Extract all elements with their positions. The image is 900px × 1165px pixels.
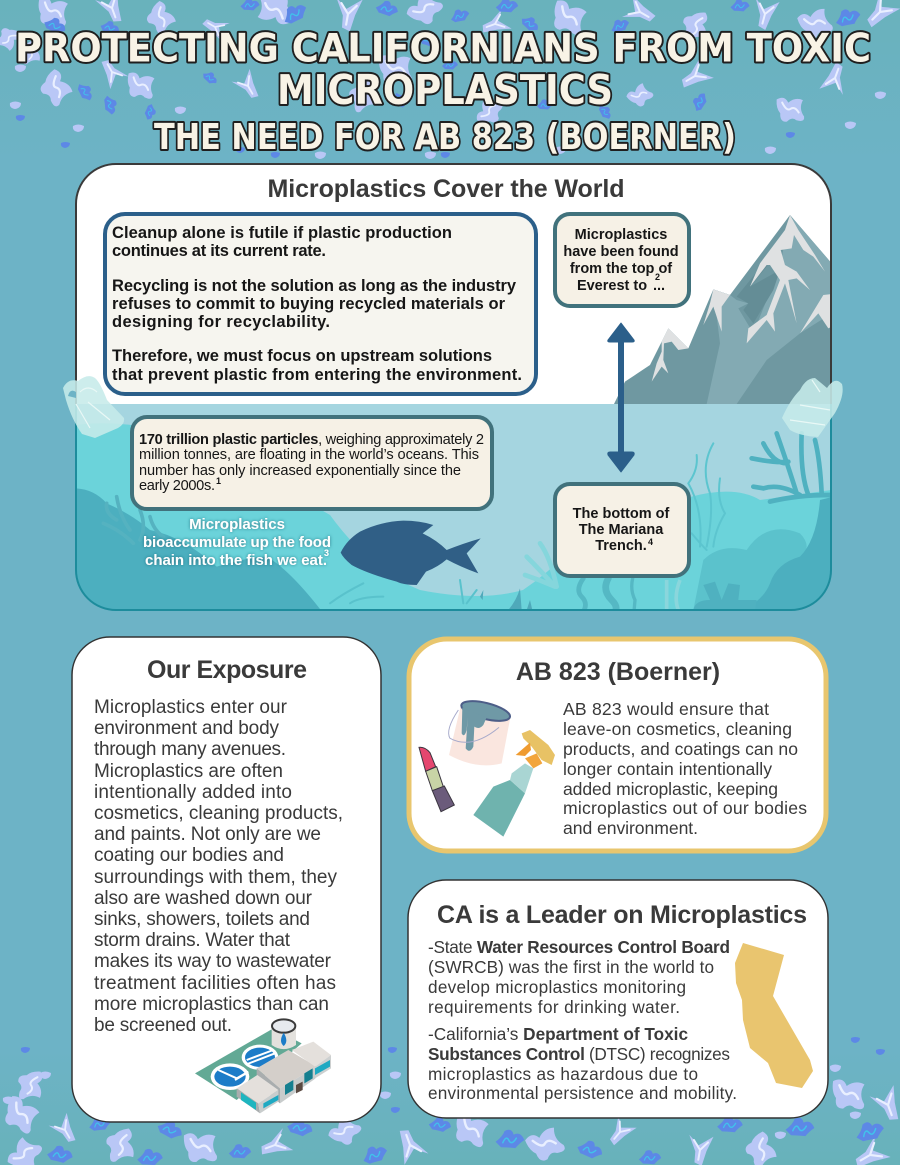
body text: intentionally added into (94, 782, 292, 803)
icon: plastic bag right (782, 378, 843, 437)
body text: requirements for drinking water. (428, 997, 680, 1017)
body text: be screened out. (94, 1015, 232, 1036)
body text: -California’s Department of Toxic (428, 1024, 688, 1044)
body text: AB 823 would ensure that (563, 699, 769, 719)
text: bioaccumulation: bioaccumulate up the food (143, 534, 331, 551)
callout: upstream solutions: designing for recyclability. (112, 313, 330, 331)
body text: longer contain intentionally (563, 759, 772, 779)
body text (563, 699, 807, 838)
heading: AB 823 (Boerner) (516, 658, 720, 686)
callout: 170 trillion particles (132, 417, 492, 509)
icon: california map (735, 943, 813, 1088)
text: bioaccumulation: chain into the fish we eat. (145, 552, 327, 569)
callout: mariana trench: Trench. (595, 538, 647, 554)
body text: storm drains. Water that (94, 930, 291, 951)
body text: environment and body (94, 718, 280, 739)
mountains (614, 215, 832, 404)
body text: Microplastics enter our (94, 697, 288, 718)
body text: -State Water Resources Control Board (428, 937, 730, 957)
body text: cosmetics, cleaning products, (94, 803, 343, 824)
callout: 170 trillion particles: 170 trillion plastic particles, weighing approximately 2 (139, 432, 484, 448)
body text: products, and coatings can no (563, 739, 798, 759)
body text: and paints. Not only are we (94, 824, 321, 845)
heading: Our Exposure (147, 656, 307, 684)
body text: develop microplastics monitoring (428, 977, 686, 997)
body text: also are washed down our (94, 888, 313, 909)
body text: environmental persistence and mobility. (428, 1083, 737, 1103)
callout: everest: Microplastics (575, 227, 667, 243)
body text: Microplastics are often (94, 761, 283, 782)
callout: everest: ... (653, 278, 665, 294)
callout: 170 trillion particles: number has only increased exponentially since the (139, 463, 461, 479)
callout: everest: have been found (563, 244, 679, 260)
callout: upstream solutions: Cleanup alone is futile if plastic production (112, 224, 452, 242)
icon: paint can (449, 697, 512, 765)
arrow: everest to trench (608, 323, 634, 472)
water scene (73, 404, 833, 613)
heading: Microplastics Cover the World (268, 175, 624, 203)
title (15, 26, 871, 158)
callout: mariana trench (555, 484, 689, 576)
body text (94, 697, 343, 1036)
callout: upstream solutions: that prevent plastic from entering the environment. (112, 366, 522, 384)
callout: everest: 2 (655, 272, 660, 282)
icon: plastic bag left (63, 376, 124, 438)
callout: upstream solutions: Therefore, we must focus on upstream solutions (112, 347, 492, 365)
icon: lipstick (419, 747, 454, 812)
callout: mariana trench: 4 (648, 537, 653, 547)
title: MICROPLASTICS (277, 66, 613, 114)
body text: microplastics as hazardous due to (428, 1064, 698, 1084)
text: bioaccumulation: Microplastics (189, 516, 285, 533)
text: bioaccumulation (143, 516, 331, 569)
panel: CA is a leader (408, 880, 828, 1118)
callout: 170 trillion particles: early 2000s. (139, 478, 215, 494)
callout: everest: Everest to (577, 278, 647, 294)
title: PROTECTING CALIFORNIANS FROM TOXIC (15, 26, 871, 72)
icon: fish (341, 521, 481, 585)
icon: wastewater treatment plant (195, 1019, 331, 1113)
heading: CA is a Leader on Microplastics (437, 901, 807, 929)
callout: 170 trillion particles: 1 (216, 476, 221, 486)
body text: microplastics out of our bodies (563, 798, 807, 818)
icon: spray bottle (473, 730, 555, 837)
callout: mariana trench: The bottom of (573, 506, 669, 522)
body text: added microplastic, keeping (563, 779, 778, 799)
panel: AB 823 (409, 639, 826, 851)
body text: surroundings with them, they (94, 867, 338, 888)
body text: makes its way to wastewater (94, 951, 332, 972)
callout: upstream solutions (105, 214, 536, 394)
callout: 170 trillion particles: million tonnes, are floating in the world’s oceans. This (139, 447, 479, 463)
body text: (SWRCB) was the first in the world to (428, 957, 714, 977)
callout: upstream solutions: refuses to commit to buying recycled materials or (112, 295, 506, 313)
callout: upstream solutions: Recycling is not the solution as long as the industry (112, 277, 517, 295)
body text: leave-on cosmetics, cleaning (563, 719, 792, 739)
title: THE NEED FOR AB 823 (BOERNER) (154, 117, 736, 158)
body text: coating our bodies and (94, 845, 284, 866)
text: bioaccumulation: 3 (324, 548, 329, 558)
body text: more microplastics than can (94, 994, 329, 1015)
panel outline (76, 164, 831, 404)
body text (428, 937, 737, 1103)
body text: treatment facilities often has (94, 973, 336, 994)
body text: Substances Control (DTSC) recognizes (428, 1044, 730, 1064)
body text: sinks, showers, toilets and (94, 909, 310, 930)
callout: everest (555, 214, 689, 306)
body text: through many avenues. (94, 739, 286, 760)
panel: our exposure (72, 637, 381, 1122)
panel: microplastics cover the world (63, 164, 843, 613)
callout: mariana trench: The Mariana (579, 522, 664, 538)
callout: everest: from the top of (570, 261, 672, 277)
body text: and environment. (563, 818, 698, 838)
callout: upstream solutions: continues at its current rate. (112, 242, 326, 260)
